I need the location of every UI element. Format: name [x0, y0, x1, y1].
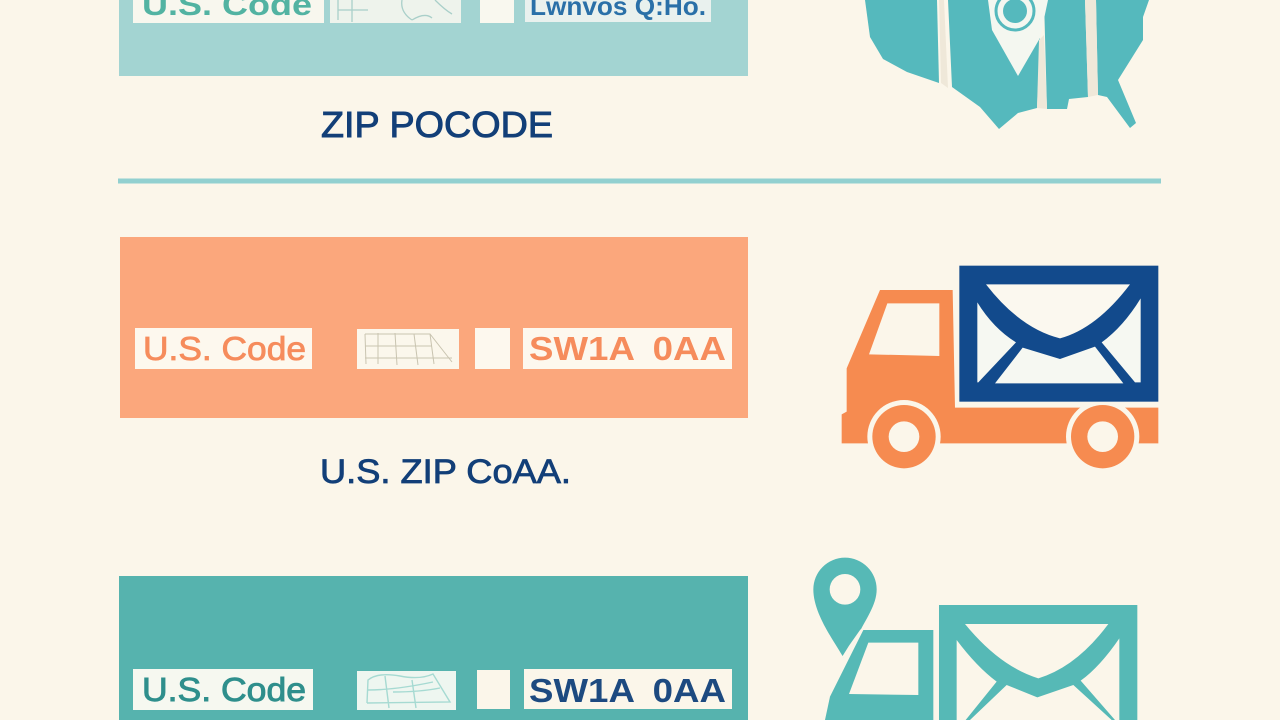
blank box	[477, 670, 510, 709]
blank box	[480, 0, 514, 23]
map thumbnail	[357, 671, 456, 710]
heading: U.S. ZIP CoAA.: U.S. ZIP CoAA.	[320, 453, 571, 491]
map thumbnail	[357, 329, 459, 369]
envelope	[959, 266, 1158, 402]
truck body	[842, 290, 1158, 443]
panel: orange code strip	[120, 237, 748, 418]
label box: U.S. Code: U.S. Code	[142, 671, 306, 708]
envelope	[939, 605, 1137, 720]
divider	[118, 178, 1161, 184]
map thumbnail	[330, 0, 461, 23]
icon: location pin and mail truck	[813, 558, 1137, 720]
blank box	[475, 328, 510, 369]
code box: SW1A 0AA	[529, 330, 726, 367]
truck window	[849, 643, 918, 695]
rear wheel	[867, 400, 941, 473]
heading: ZIP POCODE: ZIP POCODE	[321, 104, 553, 145]
icon: U.S. map with location pin	[865, 0, 1149, 129]
location pin	[813, 558, 877, 657]
front wheel	[1066, 400, 1139, 473]
truck cab	[825, 630, 933, 720]
code box: SW1A 0AA	[529, 672, 726, 709]
truck window	[869, 303, 939, 356]
panel: top teal code strip	[119, 0, 748, 76]
icon: mail delivery truck	[842, 266, 1158, 473]
panel: teal code strip	[119, 576, 748, 720]
label box: U.S. Code: U.S. Code	[143, 330, 306, 367]
